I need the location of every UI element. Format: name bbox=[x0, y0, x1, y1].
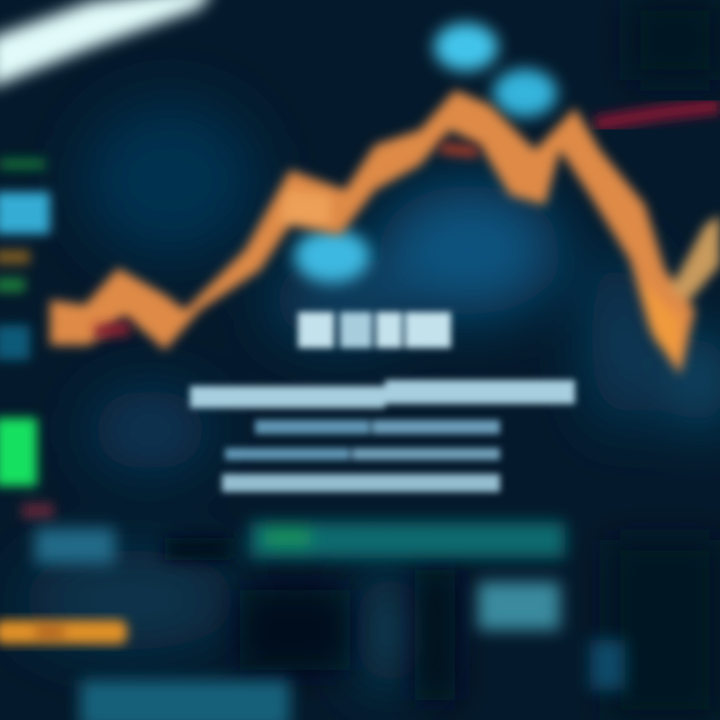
orange label bottom left bbox=[0, 620, 127, 644]
cyan blob under chart bbox=[294, 229, 370, 283]
red accents in chart bbox=[95, 148, 478, 332]
background glows bbox=[20, 100, 720, 690]
red line top right bbox=[595, 106, 720, 124]
dark lower blocks bbox=[240, 0, 720, 720]
heading (illegible blurred text) bbox=[298, 312, 451, 348]
subtitle (illegible blurred text) bbox=[190, 380, 575, 492]
line chart: orange price line bbox=[50, 90, 720, 375]
lower panel strip bbox=[35, 522, 625, 720]
cyan blobs at top bbox=[434, 23, 557, 117]
left sidebar indicators bbox=[0, 158, 54, 519]
white streak top left bbox=[0, 0, 215, 88]
